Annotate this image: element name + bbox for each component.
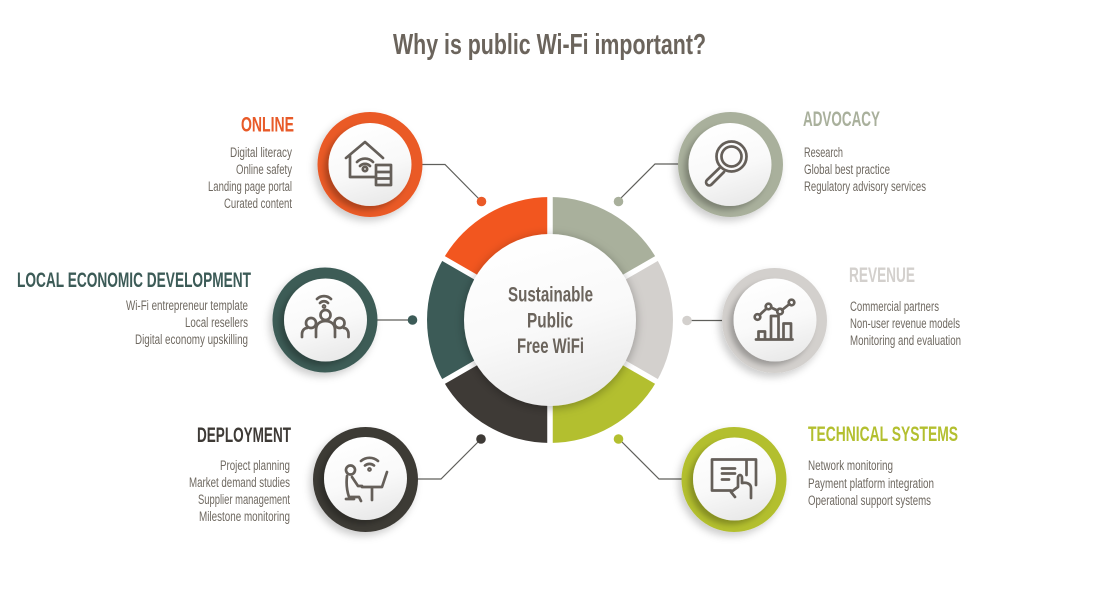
centre disc <box>464 234 636 406</box>
list: online: Curated content <box>224 196 292 211</box>
list: revenue: Commercial partners <box>850 299 939 314</box>
icon: bar and line chart <box>755 300 794 340</box>
list: online: Landing page portal <box>208 179 292 194</box>
panel: local economic development <box>17 268 417 372</box>
list: local economic development <box>126 298 248 347</box>
heading: online: ONLINE <box>241 114 294 136</box>
icon: house with wifi and server <box>346 142 391 185</box>
list: revenue <box>850 299 961 348</box>
list: online: Online safety <box>236 162 292 177</box>
segment: revenue <box>619 258 673 382</box>
panel: online <box>208 112 486 217</box>
badge: revenue <box>722 268 827 373</box>
segment: deployment <box>444 360 550 443</box>
icon: magnifying glass <box>706 142 746 185</box>
panel: advocacy <box>614 108 926 217</box>
list: advocacy <box>804 145 926 194</box>
centre label: Sustainable <box>508 284 593 306</box>
centre label: Public <box>527 310 573 332</box>
title: Why is public Wi-Fi important? <box>393 29 706 61</box>
badge: online <box>318 112 422 217</box>
list: local economic development: Digital economy upskilling <box>135 332 248 347</box>
heading: local economic development: LOCAL ECONOMIC DEVELOPMENT <box>17 269 251 292</box>
heading: advocacy: ADVOCACY <box>803 108 880 131</box>
list: local economic development: Wi-Fi entrepreneur template <box>126 298 248 313</box>
centre label: Free WiFi <box>517 335 584 358</box>
panel: technical systems <box>614 423 958 532</box>
list: advocacy: Global best practice <box>804 162 890 177</box>
connector: online <box>420 164 486 206</box>
segment: technical systems <box>550 360 656 443</box>
badge: technical systems <box>682 427 786 532</box>
connector: revenue <box>682 316 724 325</box>
list: revenue: Non-user revenue models <box>850 316 960 331</box>
connector: deployment <box>416 434 486 479</box>
list: deployment: Milestone monitoring <box>199 509 290 524</box>
list: technical systems: Network monitoring <box>808 458 893 473</box>
list: technical systems: Payment platform integration <box>808 476 934 491</box>
list: deployment <box>189 458 290 524</box>
icon: people with wifi <box>302 296 348 337</box>
list: local economic development: Local resellers <box>185 315 248 330</box>
list: technical systems <box>808 458 934 508</box>
panel: deployment <box>189 424 486 532</box>
badge: local economic development <box>272 268 378 372</box>
connector: local economic development <box>375 315 417 325</box>
list: deployment: Market demand studies <box>189 475 290 490</box>
centre label <box>508 284 593 358</box>
icon: person at laptop with wifi <box>346 458 387 501</box>
panel: revenue <box>682 264 961 373</box>
list: advocacy: Regulatory advisory services <box>804 179 926 194</box>
segment: local economic development <box>427 258 481 382</box>
badge: advocacy <box>678 112 783 217</box>
connector: advocacy <box>614 164 680 206</box>
heading: deployment: DEPLOYMENT <box>197 424 291 447</box>
list: deployment: Project planning <box>220 458 290 473</box>
heading: technical systems: TECHNICAL SYSTEMS <box>808 423 958 446</box>
list: advocacy: Research <box>804 145 843 160</box>
connector: technical systems <box>614 434 684 479</box>
list: deployment: Supplier management <box>198 492 290 507</box>
icon: touch screen <box>712 460 756 498</box>
segment: online <box>444 197 550 280</box>
segment: advocacy <box>550 197 656 280</box>
central donut diagram <box>427 190 673 450</box>
list: technical systems: Operational support systems <box>808 493 931 508</box>
list: online: Digital literacy <box>230 145 292 160</box>
heading: revenue: REVENUE <box>849 264 915 287</box>
badge: deployment <box>313 427 418 532</box>
list: revenue: Monitoring and evaluation <box>850 333 961 348</box>
list: online <box>208 145 292 211</box>
